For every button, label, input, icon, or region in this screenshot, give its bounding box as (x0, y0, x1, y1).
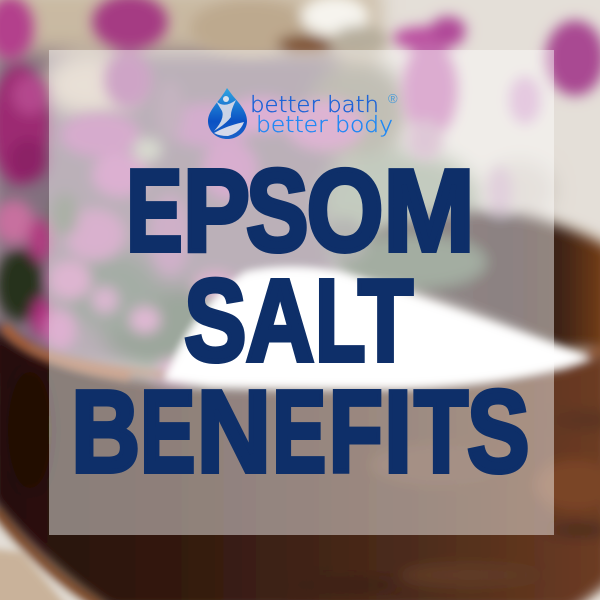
title line: BENEFITS: E (140, 366, 195, 496)
logo: better bath better body (208, 88, 398, 139)
title line: EPSOM: S (246, 146, 308, 276)
title line: EPSOM: O (307, 146, 383, 276)
title line: SALT: S (184, 256, 246, 386)
title line: BENEFITS: N (197, 366, 271, 496)
title line: EPSOM: E (126, 146, 182, 276)
title line: SALT: L (315, 256, 366, 386)
registered mark: ® (388, 91, 398, 106)
title line: SALT: A (246, 256, 314, 386)
wood grain (553, 410, 600, 430)
salt (165, 267, 590, 388)
back of bowl (350, 211, 600, 350)
title line: BENEFITS: B (71, 366, 140, 496)
title line: EPSOM: P (183, 146, 250, 276)
title line: SALT: T (358, 256, 413, 386)
logo text line 1: better bath (250, 93, 379, 118)
title line: BENEFITS: F (329, 366, 383, 496)
title line: BENEFITS: I (384, 366, 412, 496)
bowl rim highlights (4, 326, 130, 376)
pink blooms seen through panel (104, 52, 152, 108)
title line: BENEFITS: S (467, 366, 529, 496)
translucent panel (49, 50, 554, 535)
title line: EPSOM: M (384, 146, 475, 276)
title: EPSOM SALT BENEFITS (71, 146, 529, 496)
icon: water drop with figure (208, 88, 247, 139)
front bowl (0, 318, 600, 600)
flowers at left edge (0, 0, 34, 60)
logo text line 2: better body (256, 113, 393, 138)
title line: BENEFITS: T (414, 366, 468, 496)
title line: BENEFITS: E (272, 366, 326, 496)
